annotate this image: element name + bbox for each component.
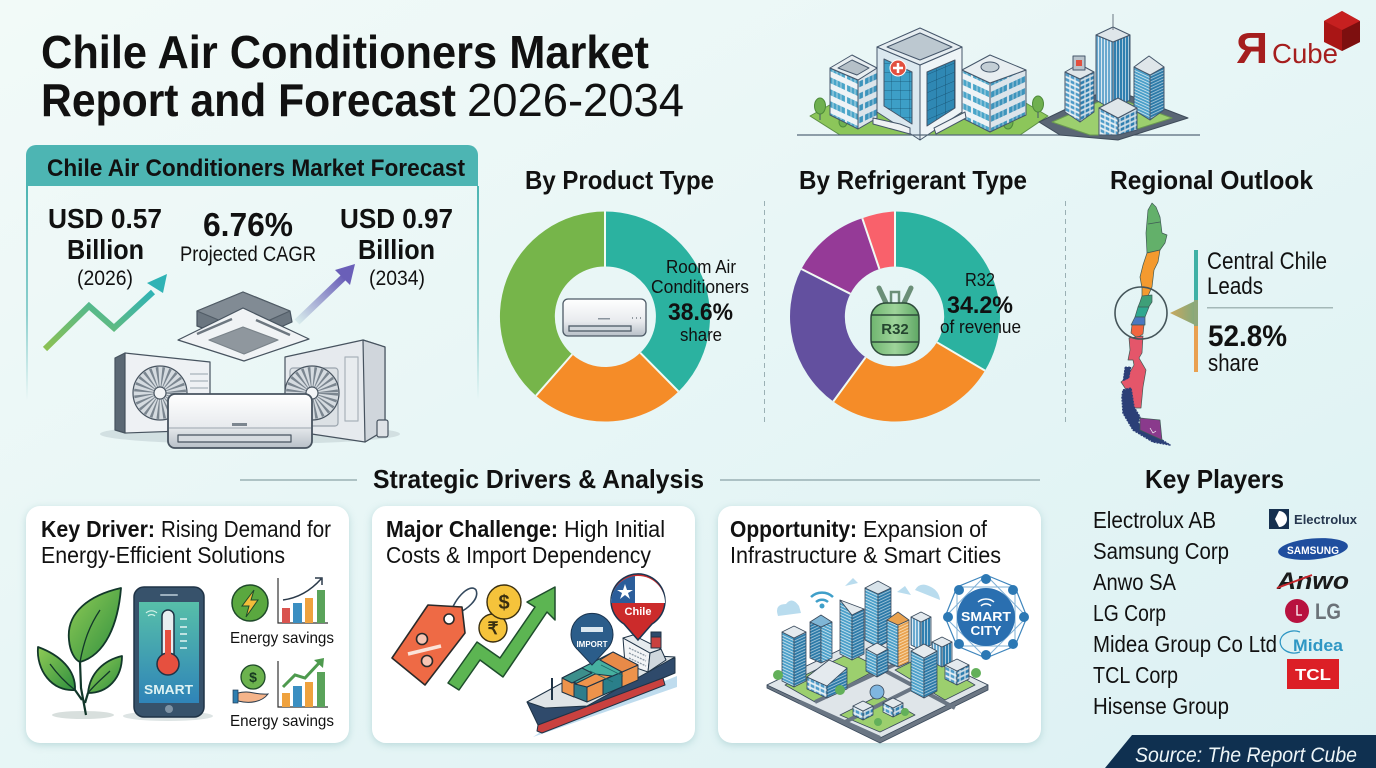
card heading bbox=[386, 516, 665, 568]
text: regional outlook callout bbox=[1207, 248, 1333, 377]
icon: R32 cylinder: R32 bbox=[881, 321, 909, 338]
label: room air conditioners: 38.6% bbox=[668, 299, 733, 326]
icon: coins: ₹ bbox=[488, 619, 499, 638]
icon: price tag bbox=[392, 588, 477, 685]
panel: key driver bbox=[26, 506, 349, 745]
illustration: smart city bbox=[767, 578, 988, 743]
logo: LG: LG bbox=[1315, 599, 1341, 624]
logo: Samsung: SAMSUNG bbox=[1287, 545, 1339, 557]
list: key players: Samsung Corp bbox=[1093, 538, 1229, 564]
icon: wall AC bbox=[563, 299, 646, 336]
icon: energy savings chart: Energy savings bbox=[230, 630, 334, 647]
logo: Electrolux: Electrolux bbox=[1294, 513, 1357, 527]
callout: central Chile marker bbox=[1115, 250, 1198, 372]
label: R32 share: R32 bbox=[965, 270, 995, 290]
label: room air conditioners bbox=[651, 257, 749, 345]
title: Chile Air Conditioners Market bbox=[41, 26, 649, 78]
icon: air conditioner units bbox=[100, 292, 400, 448]
list: key players: Hisense Group bbox=[1093, 693, 1229, 719]
list: key players: Midea Group Co Ltd bbox=[1093, 631, 1277, 657]
list: key players: Anwo SA bbox=[1093, 569, 1177, 595]
stat: 2034 value: Billion bbox=[358, 234, 435, 265]
card heading: Key Driver: bbox=[41, 516, 155, 542]
stat: 2026 value: (2026) bbox=[77, 267, 133, 290]
icon: plant bbox=[38, 588, 122, 719]
icon: smart phone thermometer bbox=[123, 587, 213, 721]
card heading bbox=[730, 516, 1001, 568]
heading: by refrigerant type: By Refrigerant Type bbox=[799, 165, 1027, 195]
list: key players bbox=[1093, 507, 1277, 719]
arrow: growth right bbox=[297, 264, 355, 322]
logo: Anwo: Anwo bbox=[1276, 568, 1349, 595]
stat: 2026 value: USD 0.57 bbox=[48, 203, 162, 234]
map: Chile regions bbox=[1121, 203, 1170, 445]
title: 2026-2034 bbox=[467, 74, 684, 126]
label: room air conditioners: Conditioners bbox=[651, 277, 749, 297]
title bbox=[41, 26, 684, 126]
icon: money savings chart: Energy savings bbox=[230, 713, 334, 730]
title: Report and Forecast bbox=[41, 74, 456, 126]
stat: 2034 value bbox=[340, 203, 453, 290]
icon: cargo ship bbox=[527, 632, 677, 737]
logo: RCube: R bbox=[1236, 24, 1268, 73]
list: key players: TCL Corp bbox=[1093, 662, 1178, 688]
card heading: Expansion of bbox=[863, 516, 988, 542]
stat: CAGR bbox=[180, 206, 316, 266]
source banner: Source: The Report Cube bbox=[1135, 744, 1357, 767]
heading: by product type: By Product Type bbox=[525, 165, 714, 195]
logo: TCL bbox=[1287, 659, 1339, 689]
panel: opportunity bbox=[718, 506, 1041, 745]
panel: market forecast bbox=[26, 145, 478, 448]
label: R32 share: 34.2% bbox=[947, 292, 1013, 319]
icon: coins bbox=[479, 585, 521, 642]
card heading: High Initial bbox=[564, 516, 665, 542]
icon: smart phone thermometer: SMART bbox=[144, 682, 193, 697]
heading: key players: Key Players bbox=[1145, 464, 1284, 494]
logo: TCL: TCL bbox=[1295, 667, 1331, 684]
icon: R32 cylinder bbox=[871, 288, 919, 355]
stat: CAGR: 6.76% bbox=[203, 206, 293, 243]
stat: CAGR: Projected CAGR bbox=[180, 243, 316, 266]
icon: Chile flag pin: Chile bbox=[625, 606, 651, 618]
stat: 2026 value bbox=[48, 203, 162, 290]
text: regional outlook callout: Leads bbox=[1207, 273, 1263, 300]
logo: Midea bbox=[1280, 631, 1344, 655]
card heading: Rising Demand for bbox=[161, 516, 331, 542]
card heading: Opportunity: bbox=[730, 516, 857, 542]
card heading: Major Challenge: bbox=[386, 516, 558, 542]
icon: smart city network badge bbox=[943, 574, 1029, 660]
icon: smart city network badge: CITY bbox=[970, 623, 1002, 638]
label: room air conditioners: Room Air bbox=[666, 257, 736, 277]
text: regional outlook callout: 52.8% bbox=[1208, 320, 1287, 353]
card heading: Infrastructure & Smart Cities bbox=[730, 542, 1001, 568]
list: key players: Electrolux AB bbox=[1093, 507, 1216, 533]
panel header: Chile Air Conditioners Market Forecast bbox=[47, 155, 465, 182]
label: R32 share: of revenue bbox=[940, 317, 1021, 337]
logo: RCube: Cube bbox=[1272, 38, 1338, 69]
icon: energy savings chart bbox=[230, 578, 334, 647]
logo: Samsung bbox=[1277, 535, 1349, 563]
stat: 2034 value: (2034) bbox=[369, 267, 425, 290]
logo: Electrolux bbox=[1269, 509, 1357, 529]
label: R32 share bbox=[940, 270, 1021, 337]
text: regional outlook callout: Central Chile bbox=[1207, 248, 1327, 275]
illustration: hospital and city buildings bbox=[797, 14, 1200, 140]
icon: import pin bbox=[571, 613, 613, 665]
arrow: growth left bbox=[45, 274, 167, 349]
logo: LG bbox=[1285, 599, 1341, 624]
card heading: Energy-Efficient Solutions bbox=[41, 542, 285, 568]
card heading bbox=[41, 516, 331, 568]
text: regional outlook callout: share bbox=[1208, 350, 1259, 377]
heading: strategic drivers: Strategic Drivers & Analysis bbox=[373, 464, 704, 494]
logo: Midea: Midea bbox=[1293, 636, 1344, 655]
heading: regional outlook: Regional Outlook bbox=[1110, 165, 1313, 195]
chart: product type donut bbox=[500, 211, 749, 422]
card heading: Costs & Import Dependency bbox=[386, 542, 651, 568]
chart: refrigerant type donut bbox=[790, 212, 1021, 422]
icon: money savings chart bbox=[230, 658, 334, 730]
icon: money savings chart: $ bbox=[249, 669, 257, 685]
icon: import pin: IMPORT bbox=[576, 640, 608, 649]
stat: 2034 value: USD 0.97 bbox=[340, 203, 453, 234]
icon: Chile flag pin bbox=[611, 574, 665, 640]
panel: major challenge bbox=[372, 506, 695, 745]
source banner bbox=[1105, 735, 1376, 768]
icon: coins: $ bbox=[498, 592, 510, 614]
list: key players: LG Corp bbox=[1093, 600, 1166, 626]
icon: smart city network badge: SMART bbox=[961, 609, 1011, 624]
panel header bbox=[26, 145, 478, 186]
stat: 2026 value: Billion bbox=[67, 234, 144, 265]
label: room air conditioners: share bbox=[680, 325, 722, 345]
arrow: rising costs bbox=[448, 587, 555, 690]
logo: RCube bbox=[1236, 11, 1360, 73]
